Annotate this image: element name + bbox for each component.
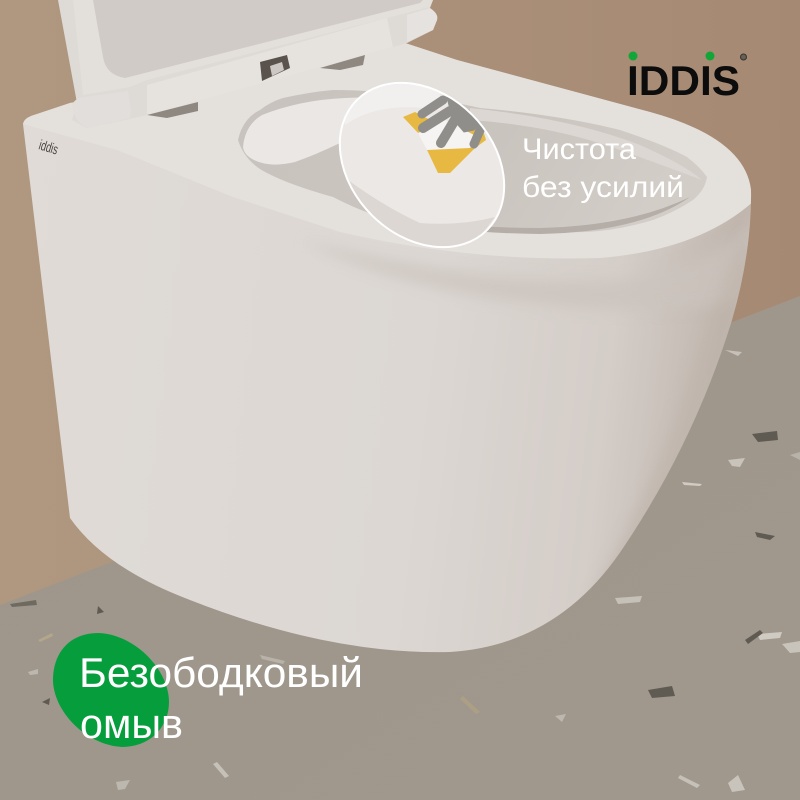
callout text xyxy=(522,133,684,204)
brand logo: IDDIS xyxy=(627,57,740,104)
callout text: без усилий xyxy=(522,171,684,204)
callout lens xyxy=(338,82,506,248)
floor chips xyxy=(10,350,800,792)
logo on body: iddis xyxy=(37,137,60,158)
grey glove xyxy=(422,97,482,144)
sponge xyxy=(403,112,486,173)
right chrome mount xyxy=(320,55,365,70)
green accent blob xyxy=(53,633,169,747)
seat hinge xyxy=(260,55,290,81)
main heading xyxy=(79,649,363,747)
bowl inner hump xyxy=(243,96,400,165)
main heading: омыв xyxy=(80,700,183,747)
callout text: Чистота xyxy=(522,133,636,166)
terrazzo floor xyxy=(0,296,800,800)
under-rim shading xyxy=(344,230,750,302)
rim top surface xyxy=(23,30,755,258)
left chrome mount xyxy=(147,102,198,118)
main heading: Безободковый xyxy=(79,649,363,696)
bowl opening xyxy=(238,90,707,234)
open toilet seat lid xyxy=(58,0,437,128)
right side shading xyxy=(612,258,746,564)
toilet body xyxy=(23,30,760,652)
